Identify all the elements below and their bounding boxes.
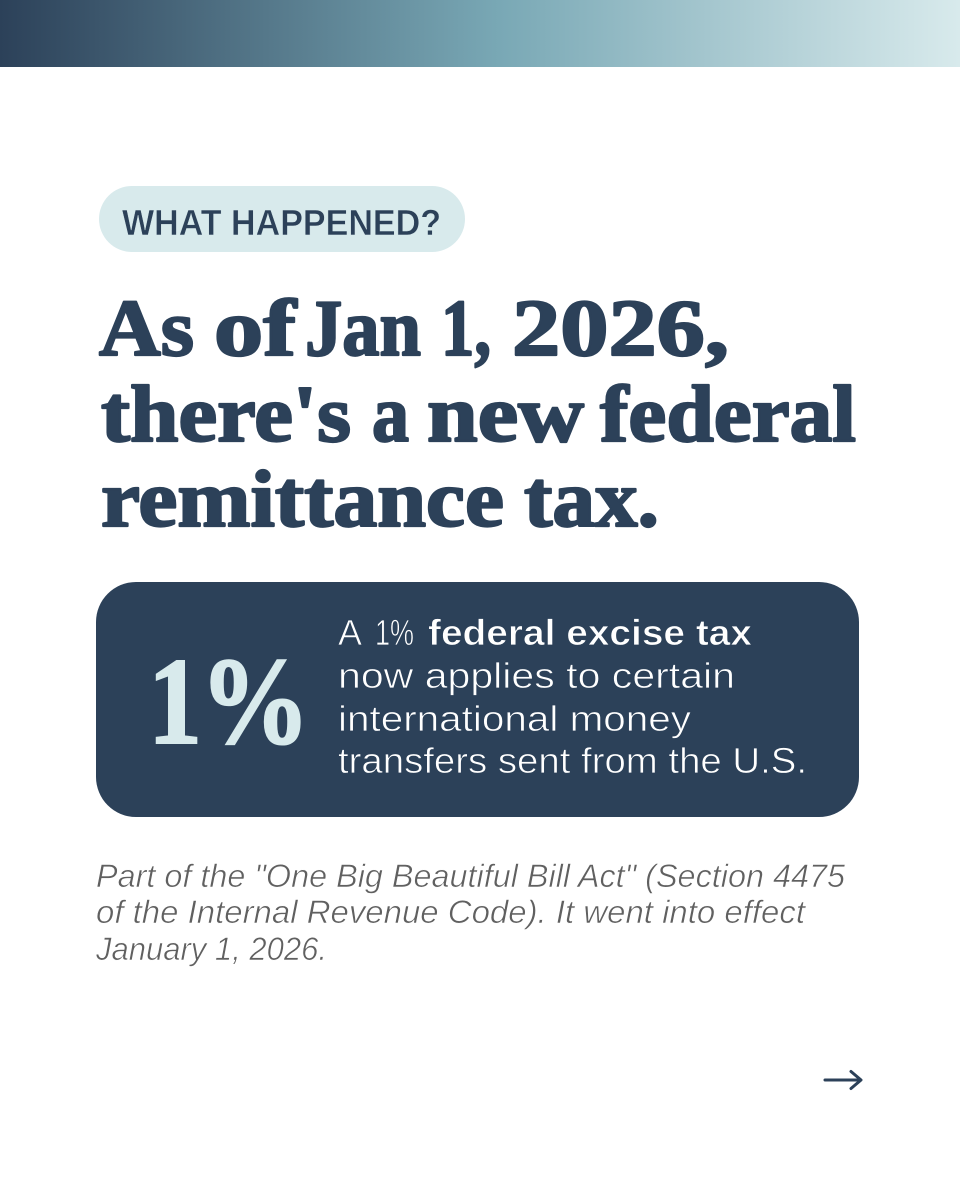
icon: next arrow (825, 1072, 861, 1088)
title: 1, (441, 283, 491, 373)
top gradient bar (0, 0, 960, 67)
callout text: 1% (375, 612, 414, 653)
callout text: transfers sent from the U.S. (338, 740, 807, 781)
title: new (427, 369, 585, 459)
big number: 1% (148, 633, 310, 770)
big number: 1%: 1 (148, 633, 202, 770)
callout text: federal excise tax (428, 612, 752, 653)
title: Jan (305, 283, 421, 373)
title: 2026, (512, 283, 729, 373)
title: a (372, 369, 409, 459)
title (99, 283, 856, 544)
panel: 1% excise tax callout (96, 582, 859, 817)
callout text: now applies to certain (338, 655, 735, 696)
callout text: international money (338, 698, 691, 739)
source note: January 1, 2026. (95, 931, 327, 967)
badge: what happened (99, 186, 465, 252)
big number: 1%: % (200, 633, 310, 770)
source note (95, 858, 845, 967)
title: federal (600, 369, 856, 459)
callout text: A (338, 612, 362, 653)
title: there's (101, 369, 351, 459)
badge: what happened: WHAT HAPPENED? (122, 202, 441, 243)
source note: Part of the "One Big Beautiful Bill Act" (Section 4475 (96, 858, 845, 894)
callout text (338, 612, 807, 781)
title: tax. (524, 454, 659, 544)
title: remittance (101, 454, 504, 544)
title: As (99, 283, 194, 373)
title: of (214, 283, 297, 373)
source note: of the Internal Revenue Code). It went into effect (96, 894, 806, 930)
